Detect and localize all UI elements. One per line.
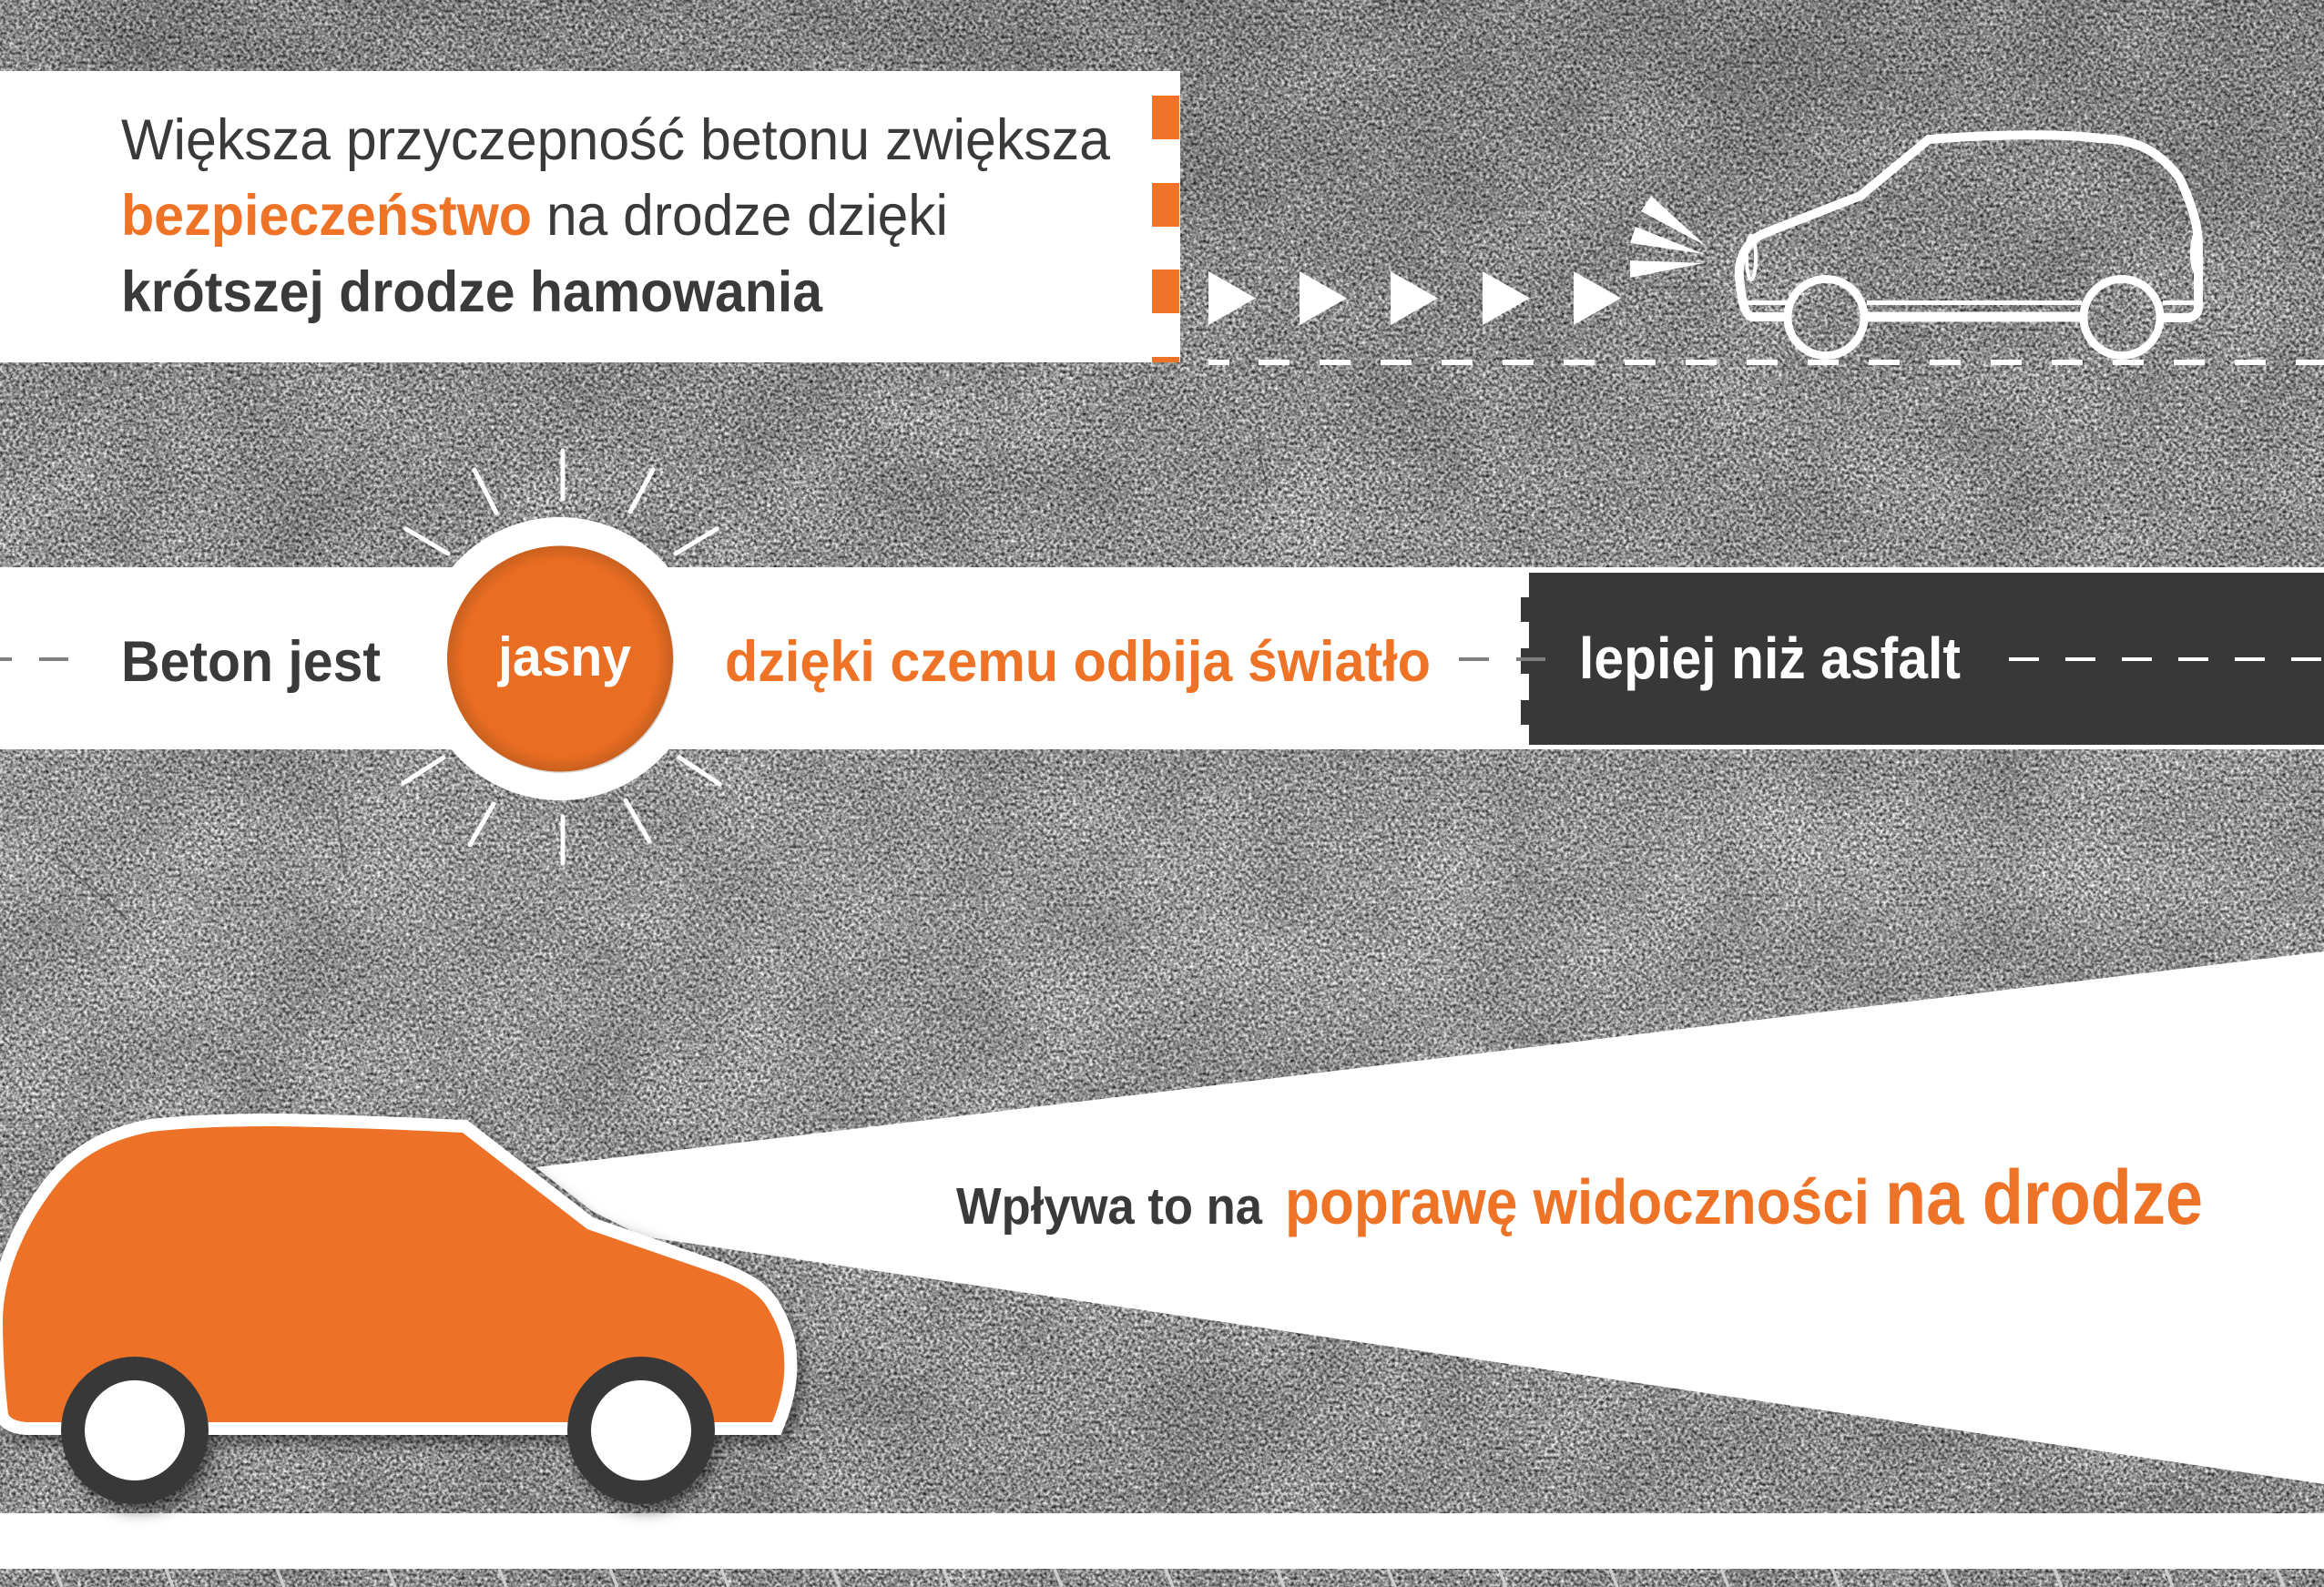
road dashed line (1208, 360, 2324, 365)
text line 1: Większa przyczepność betonu zwiększa (121, 108, 1111, 172)
grey road dashes (0, 657, 1489, 661)
rear wheel (61, 1357, 209, 1504)
bottom road markings (0, 1569, 2324, 1587)
arrows: direction triangles (1208, 271, 1621, 325)
beam text: na drodze (1885, 1155, 2203, 1240)
text: lepiej niż asfalt: lepiej niż asfalt (1579, 626, 1961, 691)
icon: sun (403, 451, 719, 863)
white road dashes (2009, 657, 2324, 661)
text: jasny: jasny (497, 626, 632, 687)
icon: headlight rays (1630, 196, 1706, 278)
text line 3: krótszej drodze hamowania (121, 260, 823, 324)
panel: reflection band (0, 567, 2324, 749)
white road strip (0, 1513, 2324, 1569)
car body (3, 1126, 784, 1422)
panel: asphalt dark box (1516, 573, 2324, 745)
headlight beam (535, 951, 2324, 1484)
icon: white outline car (1739, 135, 2199, 355)
beam text (956, 1155, 2203, 1240)
beam text: Wpływa to na (956, 1177, 1263, 1236)
orange edge ticks (1152, 96, 1179, 362)
front wheel (567, 1357, 715, 1504)
icon: orange car (3, 1126, 784, 1504)
text line 2: na drodze dzięki (546, 184, 948, 248)
text: Beton jest: Beton jest (121, 630, 381, 694)
panel: braking distance text (0, 71, 1180, 362)
text line 2: bezpieczeństwo (121, 184, 532, 248)
text: dzięki czemu odbija światło: dzięki czemu odbija światło (725, 630, 1431, 694)
text line 2 (121, 184, 948, 248)
beam text: poprawę widoczności (1285, 1166, 1870, 1237)
sun rays (403, 451, 719, 863)
